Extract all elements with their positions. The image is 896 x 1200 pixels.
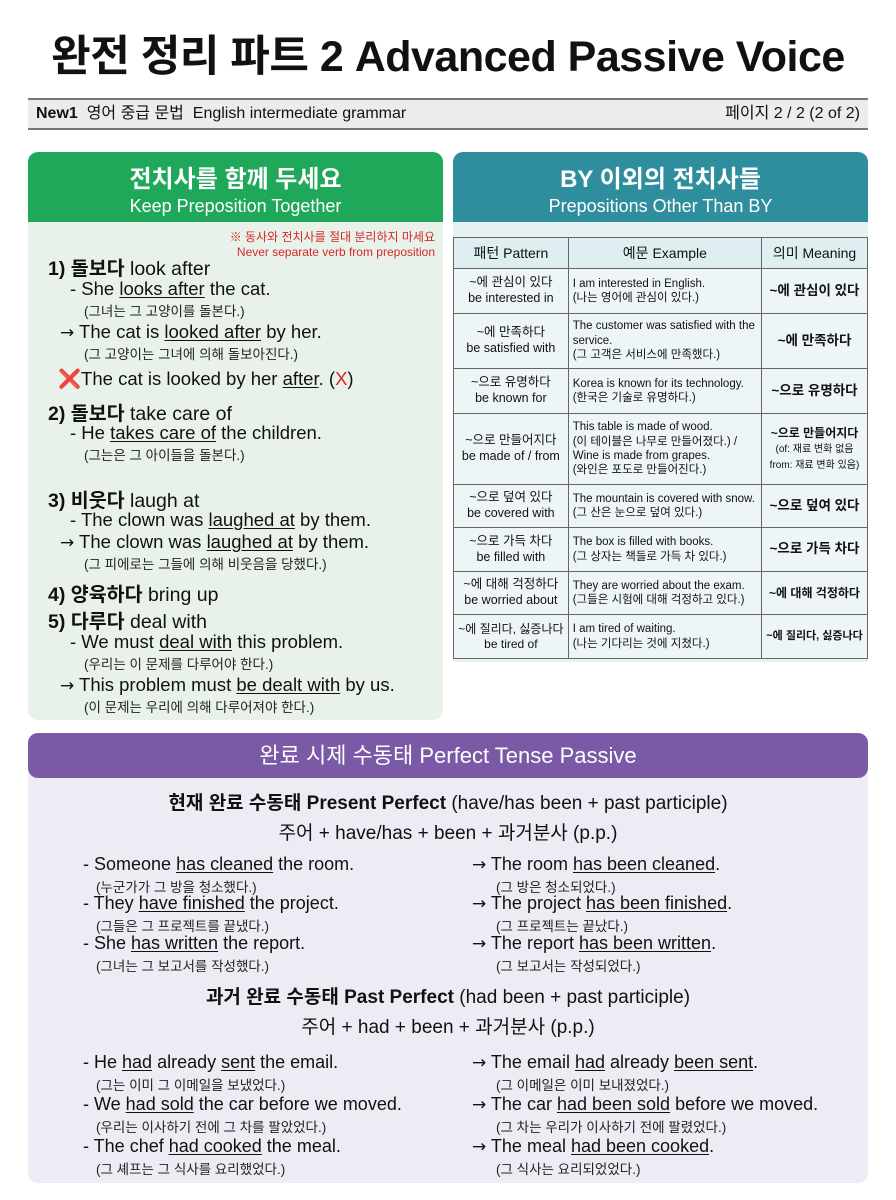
preposition table: The customer was satisfied with the service.	[573, 320, 755, 347]
preposition table: ~에 관심이 있다	[770, 283, 859, 298]
title: 완전 정리 파트 2 Advanced Passive Voice	[51, 33, 845, 81]
preposition table: be made of / from	[462, 449, 560, 463]
preposition table: ~에 대해 걱정하다	[769, 586, 860, 600]
preposition table: (of: 재료 변화 없음	[776, 444, 854, 455]
item list: - The clown was laughed at by them.	[70, 509, 371, 530]
preposition table: from: 재료 변화 있음)	[770, 460, 859, 470]
present perfect heading: 현재 완료 수동태 Present Perfect (have/has been + past participle)	[168, 793, 728, 814]
past perfect heading: 과거 완료 수동태 Past Perfect (had been + past participle)	[206, 987, 690, 1008]
present perfect examples: → The room has been cleaned.	[472, 854, 720, 875]
preposition table: be filled with	[476, 550, 545, 564]
item list: - She looks after the cat.	[70, 278, 271, 299]
preposition table: Wine is made from grapes.	[573, 450, 710, 462]
preposition table: 패턴 Pattern	[473, 245, 548, 261]
past perfect examples: (그는 이미 그 이메일을 보냈었다.)	[96, 1078, 285, 1093]
subtitle bar: New1 영어 중급 문법 English intermediate grammar	[36, 105, 406, 122]
item list: (이 문제는 우리에 의해 다루어져야 한다.)	[84, 700, 314, 715]
item list: (그는은 그 아이들을 돌본다.)	[84, 448, 245, 463]
present perfect examples: - They have finished the project.	[83, 893, 339, 913]
past perfect examples	[83, 1052, 818, 1177]
preposition table: be known for	[475, 391, 547, 405]
bottom panel header: 완료 시제 수동태 Perfect Tense Passive	[259, 743, 637, 768]
preposition table: The box is filled with books.	[573, 536, 713, 548]
preposition table: (그들은 시험에 대해 걱정하고 있다.)	[573, 594, 744, 606]
left panel header: Keep Preposition Together	[130, 196, 341, 216]
item list: 2) 돌보다 take care of	[48, 403, 232, 425]
preposition table: (그 산은 눈으로 덮여 있다.)	[573, 507, 702, 519]
present perfect examples: - Someone has cleaned the room.	[83, 854, 354, 874]
warning note	[230, 230, 435, 259]
item list: (그 피에로는 그들에 의해 비웃음을 당했다.)	[84, 557, 327, 572]
present perfect examples: (그녀는 그 보고서를 작성했다.)	[96, 959, 269, 974]
preposition table: ~으로 만들어지다	[465, 433, 556, 447]
item list: (그녀는 그 고양이를 돌본다.)	[84, 304, 245, 319]
present perfect examples: → The project has been finished.	[472, 893, 732, 914]
preposition table: (이 테이블은 나무로 만들어졌다.) /	[573, 436, 737, 448]
preposition table: 의미 Meaning	[773, 245, 856, 261]
preposition table: ~에 만족하다	[778, 333, 851, 348]
preposition table: be satisfied with	[466, 341, 555, 355]
item list: ❌The cat is looked by her after. (X)	[58, 368, 354, 389]
preposition table: (와인은 포도로 만들어진다.)	[573, 464, 706, 476]
item list: (그 고양이는 그녀에 의해 돌보아진다.)	[84, 347, 298, 362]
left panel header	[28, 152, 443, 222]
preposition table: (그 고객은 서비스에 만족했다.)	[573, 349, 720, 361]
preposition table: ~으로 가득 차다	[469, 534, 552, 548]
item list: 3) 비웃다 laugh at	[48, 490, 199, 512]
present perfect examples: → The report has been written.	[472, 933, 716, 954]
left panel header: 전치사를 함께 두세요	[129, 166, 342, 193]
past perfect examples: → The car had been sold before we moved.	[472, 1094, 818, 1115]
preposition table: (나는 기다리는 것에 지쳤다.)	[573, 638, 710, 650]
preposition table: The mountain is covered with snow.	[573, 493, 755, 505]
preposition table: ~으로 덮여 있다	[469, 490, 552, 504]
past perfect examples: (그 이메일은 이미 보내졌었다.)	[496, 1078, 669, 1093]
bottom panel header	[28, 733, 868, 778]
warning note: Never separate verb from preposition	[237, 245, 435, 259]
item list: 4) 양육하다 bring up	[48, 584, 218, 606]
panel: prepositions other than by	[453, 152, 868, 222]
preposition table: be tired of	[484, 636, 538, 650]
present perfect heading: 주어 + have/has + been + 과거분사 (p.p.)	[279, 823, 617, 844]
present perfect examples: (누군가가 그 방을 청소했다.)	[96, 880, 257, 895]
item list: (우리는 이 문제를 다루어야 한다.)	[84, 657, 273, 672]
preposition table: 예문 Example	[623, 245, 707, 261]
preposition table: be covered with	[467, 506, 555, 520]
past perfect examples: - He had already sent the email.	[83, 1052, 338, 1072]
present perfect examples: - She has written the report.	[83, 933, 305, 953]
past perfect examples: (그 식사는 요리되었었다.)	[496, 1162, 640, 1177]
present perfect examples: (그들은 그 프로젝트를 끝냈다.)	[96, 919, 269, 934]
item list: 1) 돌보다 look after	[48, 258, 210, 280]
past perfect examples: (그 차는 우리가 이사하기 전에 팔렸었다.)	[496, 1120, 726, 1135]
preposition table: ~으로 유명하다	[471, 375, 551, 389]
panel: prepositions other than by: Prepositions Other Than BY	[549, 196, 772, 216]
panel: prepositions other than by: BY 이외의 전치사들	[560, 166, 761, 193]
preposition table: (한국은 기술로 유명하다.)	[573, 392, 696, 404]
item list: → The clown was laughed at by them.	[60, 531, 369, 553]
preposition table: ~에 질리다, 싫증나다	[766, 630, 863, 642]
item list: - He takes care of the children.	[70, 422, 322, 443]
preposition table: I am interested in English.	[573, 278, 705, 290]
preposition table: ~에 질리다, 싫증나다	[458, 622, 564, 636]
present perfect examples	[83, 854, 732, 974]
preposition table: (나는 영어에 관심이 있다.)	[573, 292, 699, 304]
item list	[48, 258, 395, 715]
past perfect examples: (우리는 이사하기 전에 그 차를 팔았었다.)	[96, 1120, 326, 1135]
item list: - We must deal with this problem.	[70, 631, 343, 652]
past perfect examples: - We had sold the car before we moved.	[83, 1094, 402, 1114]
preposition table	[453, 237, 868, 659]
preposition table: ~으로 유명하다	[771, 383, 858, 398]
preposition table: ~으로 만들어지다	[771, 426, 858, 440]
present perfect examples: (그 보고서는 작성되었다.)	[496, 959, 640, 974]
past perfect examples: → The email had already been sent.	[472, 1052, 758, 1073]
preposition table: ~에 관심이 있다	[469, 275, 552, 289]
warning note: ※ 동사와 전치사를 절대 분리하지 마세요	[230, 230, 435, 244]
preposition table: They are worried about the exam.	[573, 580, 745, 592]
preposition table: ~에 대해 걱정하다	[463, 577, 558, 591]
subtitle bar: 페이지 2 / 2 (2 of 2)	[725, 105, 860, 122]
item list: 5) 다루다 deal with	[48, 611, 207, 633]
past perfect examples: - The chef had cooked the meal.	[83, 1136, 341, 1156]
panel: keep preposition together	[28, 152, 443, 720]
preposition table: be worried about	[464, 593, 557, 607]
preposition table: ~으로 덮여 있다	[770, 498, 859, 513]
subtitle bar	[28, 98, 868, 130]
past perfect examples: → The meal had been cooked.	[472, 1136, 714, 1157]
preposition table: This table is made of wood.	[573, 421, 713, 433]
preposition table: ~에 만족하다	[477, 325, 545, 339]
preposition table: be interested in	[468, 291, 554, 305]
item list: → The cat is looked after by her.	[60, 321, 322, 343]
present perfect examples: (그 방은 청소되었다.)	[496, 880, 616, 895]
preposition table: ~으로 가득 차다	[770, 541, 859, 556]
past perfect heading	[206, 987, 690, 1038]
preposition table: I am tired of waiting.	[573, 623, 676, 635]
preposition table: (그 상자는 책들로 가득 차 있다.)	[573, 550, 727, 562]
item list: → This problem must be dealt with by us.	[60, 674, 395, 696]
panel: perfect tense passive	[28, 733, 868, 1183]
present perfect examples: (그 프로젝트는 끝났다.)	[496, 919, 628, 934]
preposition table: Korea is known for its technology.	[573, 378, 744, 390]
past perfect heading: 주어 + had + been + 과거분사 (p.p.)	[301, 1017, 595, 1038]
present perfect heading	[168, 793, 728, 844]
past perfect examples: (그 셰프는 그 식사를 요리했었다.)	[96, 1162, 285, 1177]
